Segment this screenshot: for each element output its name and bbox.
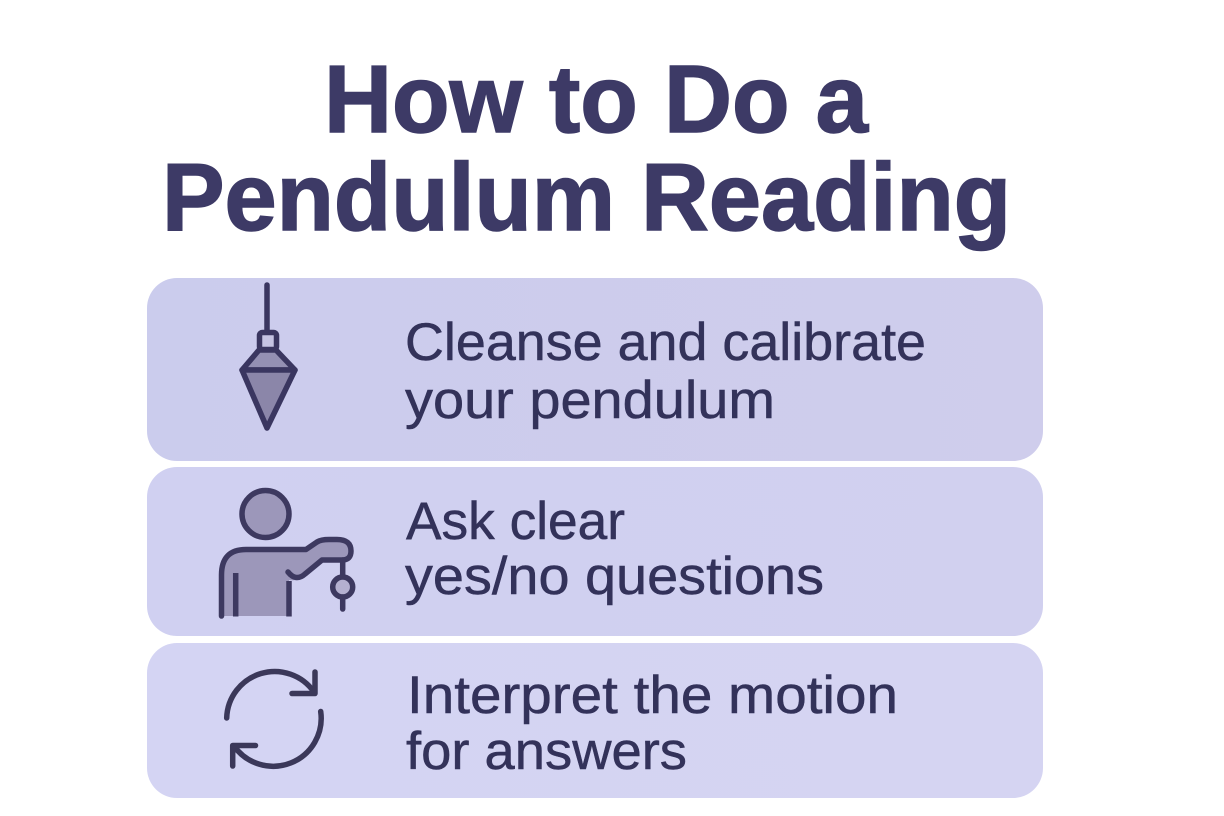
title: How to Do a <box>324 46 869 153</box>
step 1 text: your pendulum <box>405 371 775 430</box>
step 1 text: Cleanse and calibrate <box>405 313 926 372</box>
panel: step 2 ask questions <box>147 467 1043 636</box>
step 3 text: Interpret the motion <box>407 666 898 725</box>
panel: step 1 cleanse and calibrate <box>147 278 1043 461</box>
panel: step 3 interpret motion <box>147 643 1043 798</box>
title <box>162 46 1011 251</box>
icon: person holding pendulum <box>222 490 353 616</box>
step 2 text: yes/no questions <box>405 547 824 606</box>
step 2 text: Ask clear <box>406 492 625 551</box>
title: Pendulum Reading <box>162 144 1011 251</box>
step 3 text: for answers <box>406 722 687 781</box>
icon: cycle arrows <box>227 672 321 766</box>
icon: pendulum <box>242 285 295 428</box>
